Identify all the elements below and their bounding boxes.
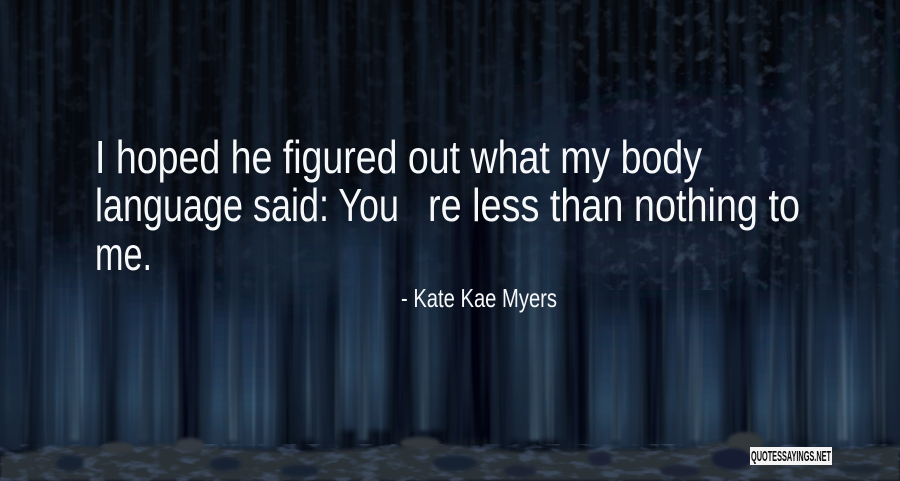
background: icicle highlights <box>70 200 848 440</box>
quote line 1: I hoped he figured out what my body <box>95 131 702 183</box>
quote text <box>95 131 800 280</box>
background: blue foliage haze <box>220 10 890 295</box>
quote line 2, after the missing apostrophe: re less than nothing to <box>428 179 800 231</box>
watermark badge <box>750 447 832 465</box>
background: foliage speckle <box>0 0 900 290</box>
quote line 2, before the missing apostrophe: language said: You <box>95 179 399 231</box>
author attribution: - Kate Kae Myers <box>401 283 557 313</box>
rocks <box>56 432 882 477</box>
background: dark gaps between icicles <box>182 160 746 440</box>
quote line 3: me. <box>95 228 152 280</box>
background: light vertical streaks <box>7 221 886 446</box>
background: snowy ground <box>0 432 900 481</box>
snow mottling <box>0 444 900 481</box>
